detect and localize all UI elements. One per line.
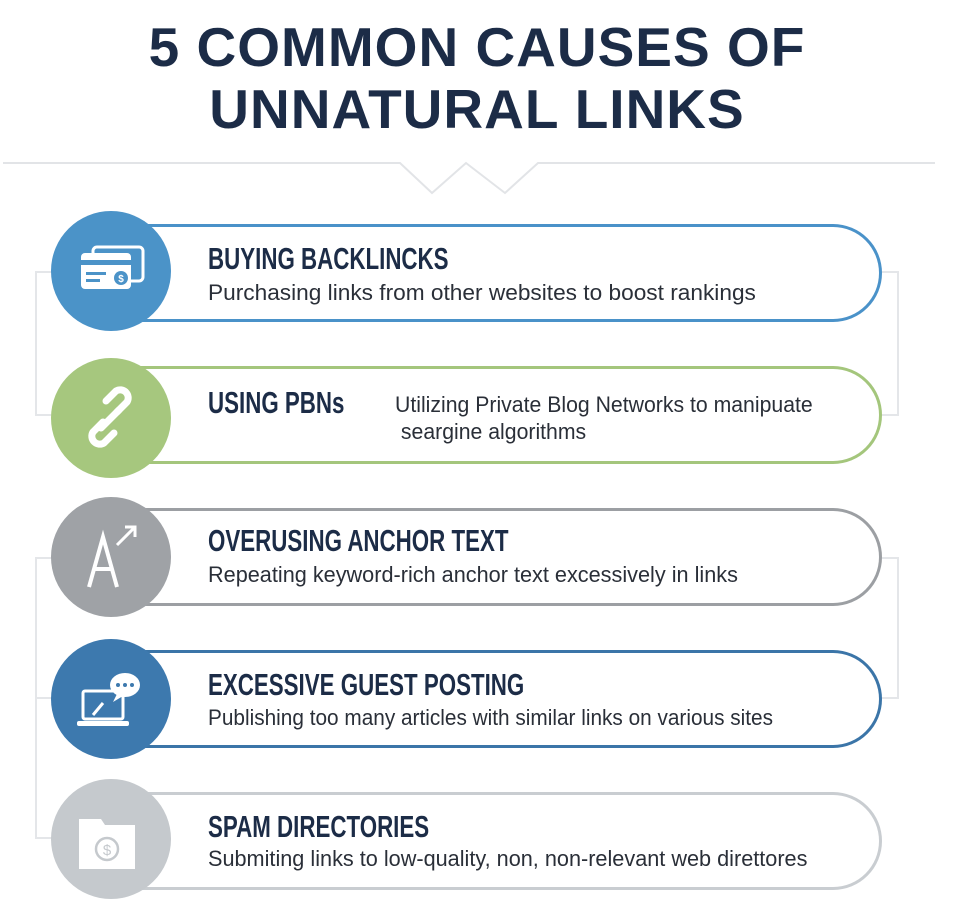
- icon: letter A arrow: [51, 497, 171, 617]
- description: Utilizing Private Blog Networks to manipuate: [395, 392, 813, 417]
- panel: spam directories: [51, 779, 882, 899]
- icon: chain link: [51, 358, 171, 478]
- icon: folder dollar: [51, 779, 171, 899]
- icon: laptop chat: [51, 639, 171, 759]
- heading: SPAM DIRECTORIES: [208, 809, 429, 844]
- heading: USING PBNs: [208, 385, 344, 420]
- description: seargine algorithms: [401, 419, 586, 444]
- title: 5 COMMON CAUSES OF: [149, 16, 805, 78]
- icon: folder dollar: $: [103, 842, 112, 859]
- heading: BUYING BACKLINCKS: [208, 241, 449, 276]
- description: Repeating keyword-rich anchor text excessively in links: [208, 562, 738, 587]
- icon: credit card: [51, 211, 171, 331]
- description: Publishing too many articles with similar links on various sites: [208, 705, 773, 730]
- panel: excessive guest posting: [51, 639, 882, 759]
- panel: using PBNs: [51, 358, 882, 478]
- icon: credit card: $: [118, 274, 124, 285]
- heading: OVERUSING ANCHOR TEXT: [208, 523, 509, 558]
- heading: EXCESSIVE GUEST POSTING: [208, 667, 524, 702]
- description: [395, 392, 813, 444]
- description: Submiting links to low-quality, non, non-relevant web direttores: [208, 846, 807, 871]
- title: UNNATURAL LINKS: [209, 78, 745, 140]
- title: [149, 16, 805, 140]
- panel: buying backlinks: [51, 211, 882, 331]
- panel: overusing anchor text: [51, 497, 882, 617]
- description: Purchasing links from other websites to boost rankings: [208, 280, 756, 305]
